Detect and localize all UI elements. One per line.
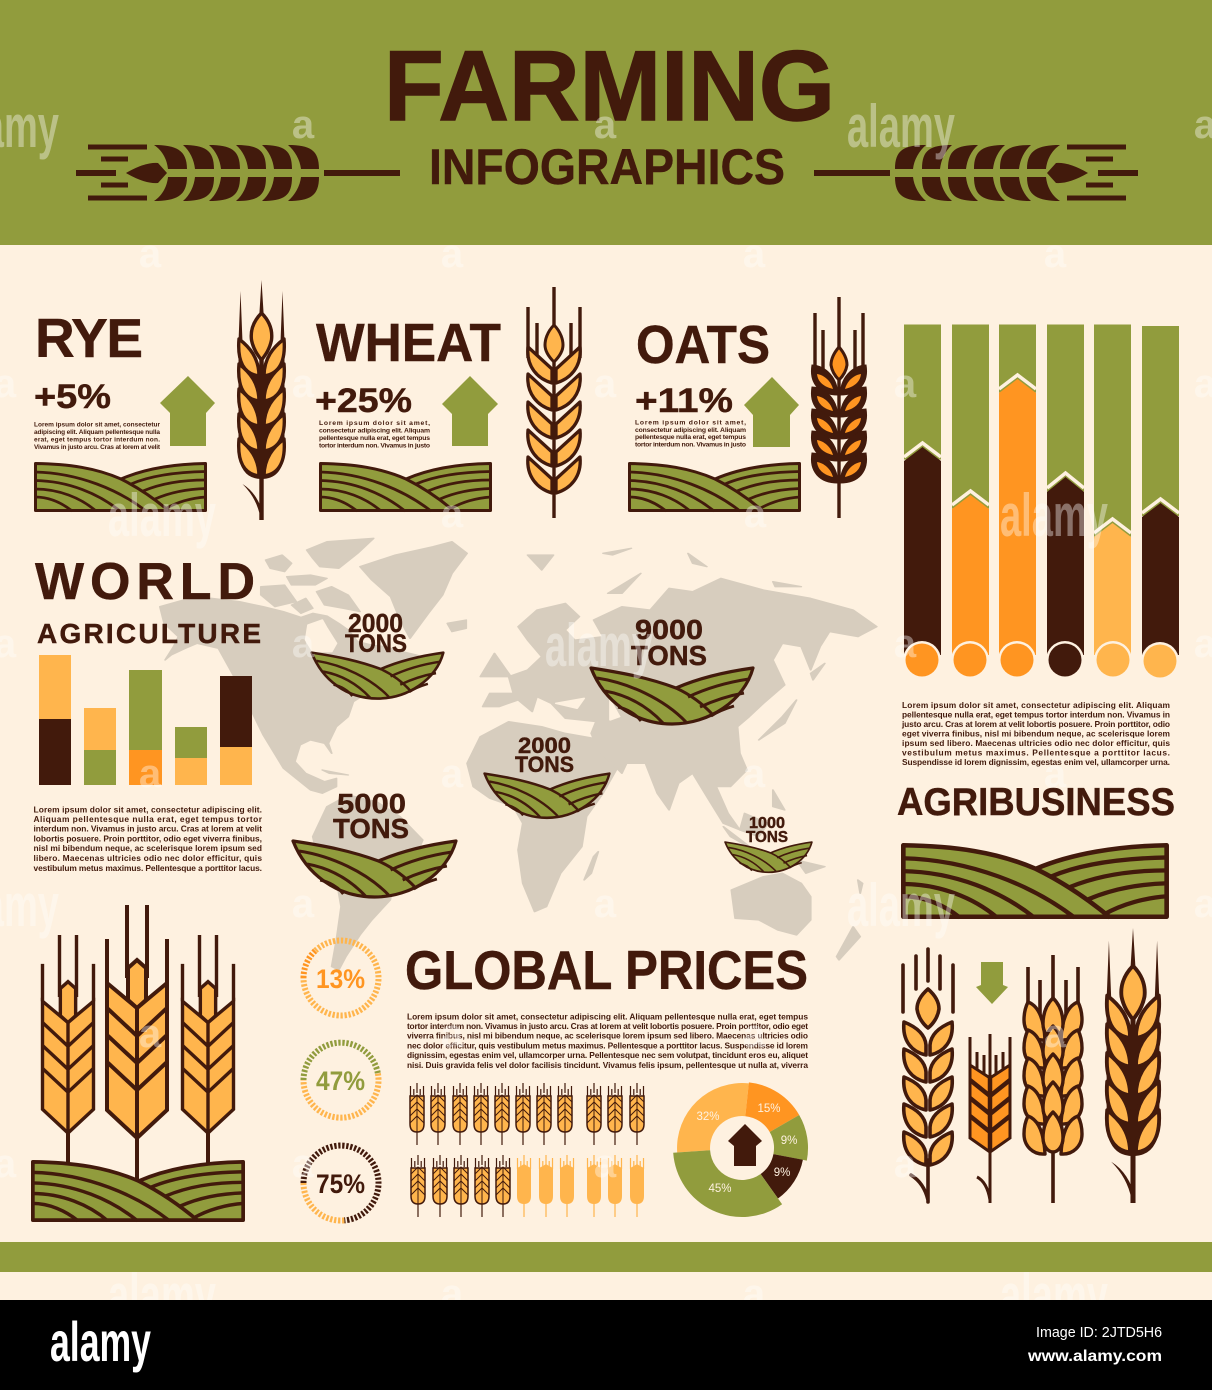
bar 1: [903, 324, 941, 679]
arrow: down: [976, 962, 1008, 1004]
map marker: Africa: [485, 733, 609, 818]
donut chart: [673, 1082, 808, 1217]
map marker: Southeast Asia: TONS: [746, 829, 788, 846]
text block: right column: Lorem ipsum dolor sit amet, consectetur adipiscing elit. Aliquam: [902, 700, 1170, 710]
watermarks: a: [594, 1142, 617, 1186]
icon: right wheat ornament: [814, 144, 1138, 201]
text block: right column: pellentesque nulla erat, eget tempus tortor interdum non. Vivamus in: [902, 710, 1170, 720]
watermarks: a: [441, 232, 464, 276]
donut chart: 9%: [774, 1167, 790, 1179]
heading: OATS: [636, 315, 770, 375]
watermarks: a: [594, 103, 617, 147]
text block: [635, 420, 746, 448]
watermarks: a: [139, 752, 162, 796]
text block: Vivamus in justo arcu. Cras at lorem at velit: [34, 444, 161, 451]
icon: left wheat ornament: [76, 144, 400, 201]
icon: rye ear: [238, 280, 284, 520]
map marker: Southeast Asia: 1000: [749, 815, 785, 832]
gauge: 75%: [303, 1146, 378, 1221]
watermarks: a: [292, 103, 315, 147]
map marker: Russia: TONS: [631, 640, 707, 671]
text block: world agriculture: libero. Maecenas ultricies odio nec dolor efficitur, quis: [34, 853, 262, 863]
watermarks: alamy: [1000, 1262, 1108, 1329]
icon: wheat ear B: [970, 1034, 1010, 1203]
icon: oat ear: [811, 297, 867, 518]
bar 4: [1046, 324, 1084, 679]
gauge: 47%: 47%: [316, 1066, 365, 1096]
panel: stacked arrow bars: [903, 324, 1179, 680]
heading: world: WORLD: [35, 553, 255, 611]
text block: world agriculture: vestibulum metus maximus. Pellentesque a porttitor lacus.: [34, 863, 262, 873]
text block: tortor interdum non. Vivamus in justo: [319, 442, 430, 450]
watermarks: alamy: [1000, 482, 1108, 549]
map marker: Southeast Asia: [725, 815, 812, 872]
map marker: South America: TONS: [333, 813, 409, 844]
gauge: 13%: 13%: [316, 964, 365, 994]
watermarks: alamy: [108, 1262, 216, 1329]
map marker: Africa: 2000: [518, 733, 571, 758]
text block: global prices: [407, 1012, 808, 1070]
footer logo: alamy: [50, 1310, 151, 1373]
watermarks: a: [894, 1142, 917, 1186]
bar 5: [1094, 324, 1132, 679]
watermarks: a: [292, 622, 315, 666]
text block: world agriculture: lobortis posuere. Proin porttitor, odio eget viverra finibus,: [34, 834, 262, 844]
text block: world agriculture: Lorem ipsum dolor sit amet, consectetur adipiscing elit.: [34, 804, 262, 814]
title: FARMING: [384, 30, 835, 141]
donut chart: 15%: [757, 1103, 781, 1115]
text block: global prices: tortor interdum non. Vivamus in justo arcu. Cras at lorem at velit lobortis posuere. Proin porttitor, odio eget: [407, 1021, 808, 1031]
heading: agribusiness: AGRIBUSINESS: [897, 781, 1175, 824]
percentage: +5%: [34, 378, 111, 416]
percentage: +25%: [315, 382, 412, 420]
map marker: North America: TONS: [345, 630, 407, 658]
bar chart: world agriculture: [39, 655, 252, 785]
arrow: [744, 377, 799, 447]
text block: consectetur adipiscing elit. Aliquam: [319, 428, 430, 434]
bar 6: [1141, 326, 1179, 680]
text block: adipiscing elit. Aliquam pellentesque nulla: [34, 429, 160, 436]
field: [320, 464, 491, 511]
panel: oats: [629, 297, 867, 518]
donut chart: 32%: [696, 1111, 720, 1123]
text block: right column: justo arcu. Cras at lorem at velit lobortis posuere. Proin porttitor, odio: [901, 719, 1170, 729]
bottom band: [0, 1242, 1212, 1272]
watermarks: alamy: [847, 872, 955, 939]
panel: wheat: [315, 287, 580, 518]
subtitle: INFOGRAPHICS: [429, 139, 785, 195]
text block: [319, 420, 430, 450]
watermarks: a: [139, 1012, 162, 1056]
field: agribusiness: [903, 845, 1167, 917]
icon: wheat ear A: [903, 949, 953, 1202]
field: [629, 464, 800, 511]
gauge: 75%: 75%: [316, 1169, 365, 1199]
map marker: North America: 2000: [348, 608, 403, 638]
arrow: [442, 376, 498, 446]
watermarks: alamy: [545, 612, 653, 679]
heading: RYE: [35, 307, 143, 369]
map marker: South America: [293, 788, 456, 897]
text block: world agriculture: nisl mi bibendum neque, ac scelerisque lorem ipsum sed: [34, 843, 262, 853]
watermarks: alamy: [108, 482, 216, 549]
map marker: South America: 5000: [337, 788, 406, 819]
text block: right column: vestibulum metus maximus. Pellentesque a porttitor lacus.: [902, 748, 1170, 758]
text block: tortor interdum non. Vivamus in justo: [635, 442, 746, 448]
icon: wheat ear C: [1024, 955, 1082, 1203]
arrow: [160, 376, 215, 446]
map marker: North America: [312, 608, 443, 699]
text block: world agriculture: Aliquam pellentesque nulla erat, eget tempus tortor: [34, 814, 263, 824]
watermarks: a: [594, 362, 617, 406]
watermarks: a: [743, 1272, 766, 1316]
watermarks: a: [594, 882, 617, 926]
watermarks: a: [139, 232, 162, 276]
watermarks: a: [743, 752, 766, 796]
icon: wheat ear D: [1107, 928, 1159, 1203]
site url: www.alamy.com: [1027, 1348, 1162, 1365]
footer bar: [0, 1300, 1212, 1390]
text block: Lorem ipsum dolor sit amet, consectetur: [34, 422, 160, 428]
watermarks: alamy: [847, 93, 955, 160]
text block: erat, eget tempus tortor interdum non.: [34, 436, 160, 444]
watermarks: a: [441, 492, 464, 536]
donut chart: 45%: [708, 1183, 732, 1195]
text block: world agriculture: interdum non. Vivamus in justo arcu. Cras at lorem at velit: [34, 824, 262, 834]
panel: rye: [34, 280, 284, 520]
watermarks: a: [894, 362, 917, 406]
watermarks: a: [292, 362, 315, 406]
text block: right column: eget viverra finibus, nisl mi bibendum neque, ac scelerisque lorem: [902, 728, 1170, 738]
text block: right column: ipsum sed libero. Maecenas ultricies odio nec dolor efficitur, quis: [902, 738, 1170, 748]
percentage: +11%: [635, 382, 733, 420]
watermarks: a: [894, 622, 917, 666]
text block: consectetur adipiscing elit. Aliquam: [635, 427, 746, 434]
text block: global prices: nisi. Duis gravida felis vel dolor facilisis tincidunt. Vivamus felis ipsum, pellentesque ut nulla at, viverra: [407, 1060, 808, 1070]
text block: Lorem ipsum dolor sit amet,: [635, 420, 746, 426]
illustration: three wheat ears on field: [32, 905, 244, 1221]
header band: [0, 0, 1212, 245]
text block: right column: [901, 700, 1170, 767]
image id: Image ID: 2JTD5H6: [1036, 1324, 1162, 1341]
watermarks: a: [292, 882, 315, 926]
field: [35, 464, 206, 511]
map marker: Russia: 9000: [635, 614, 703, 645]
text block: global prices: dignissim, egestas enim vel, ullamcorper urna. Pellentesque nec sem volutpat, tincidunt eros eu, aliquet: [407, 1050, 808, 1060]
map marker: Africa: TONS: [515, 752, 574, 777]
watermarks: a: [292, 1142, 315, 1186]
text block: pellentesque nulla erat, eget tempus: [319, 435, 430, 442]
text block: pellentesque nulla erat, eget tempus: [635, 434, 746, 441]
heading: agriculture: AGRICULTURE: [37, 618, 261, 649]
text block: global prices: viverra finibus, nisl mi bibendum neque, ac scelerisque lorem ipsum sed libero. Maecenas ultricies odio: [407, 1030, 808, 1040]
text block: right column: Suspendisse id lorem dignissim, egestas enim vel, ullamcorper urna.: [902, 757, 1170, 767]
watermarks: a: [441, 1272, 464, 1316]
watermarks: a: [1044, 752, 1067, 796]
heading: global prices: GLOBAL PRICES: [405, 939, 808, 1001]
bar 3: [998, 324, 1036, 679]
heading: WHEAT: [316, 313, 501, 373]
text block: [34, 422, 161, 451]
watermarks: a: [1044, 232, 1067, 276]
text block: global prices: Lorem ipsum dolor sit amet, consectetur adipiscing elit. Aliquam pellentesque nulla erat, eget tempus: [407, 1012, 808, 1022]
text block: world agriculture: [34, 804, 263, 873]
watermarks: a: [744, 492, 767, 536]
watermarks: a: [1044, 1012, 1067, 1056]
gauge: 47%: [303, 1043, 378, 1118]
donut chart: 9%: [781, 1135, 797, 1147]
watermarks: a: [441, 1012, 464, 1056]
bar 2: [951, 324, 989, 679]
world map: [160, 538, 877, 970]
text block: global prices: nec dolor efficitur, quis vestibulum metus maximus. Pellentesque a porttitor lacus. Suspendisse id lorem: [407, 1040, 808, 1050]
watermarks: a: [441, 752, 464, 796]
map marker: Russia: [591, 614, 753, 724]
text block: Lorem ipsum dolor sit amet,: [319, 420, 430, 427]
pictogram: wheat icons: [410, 1083, 644, 1217]
watermarks: a: [743, 1012, 766, 1056]
watermarks: a: [743, 232, 766, 276]
gauge: 13%: [304, 941, 378, 1016]
icon: wheat ear: [528, 287, 580, 518]
